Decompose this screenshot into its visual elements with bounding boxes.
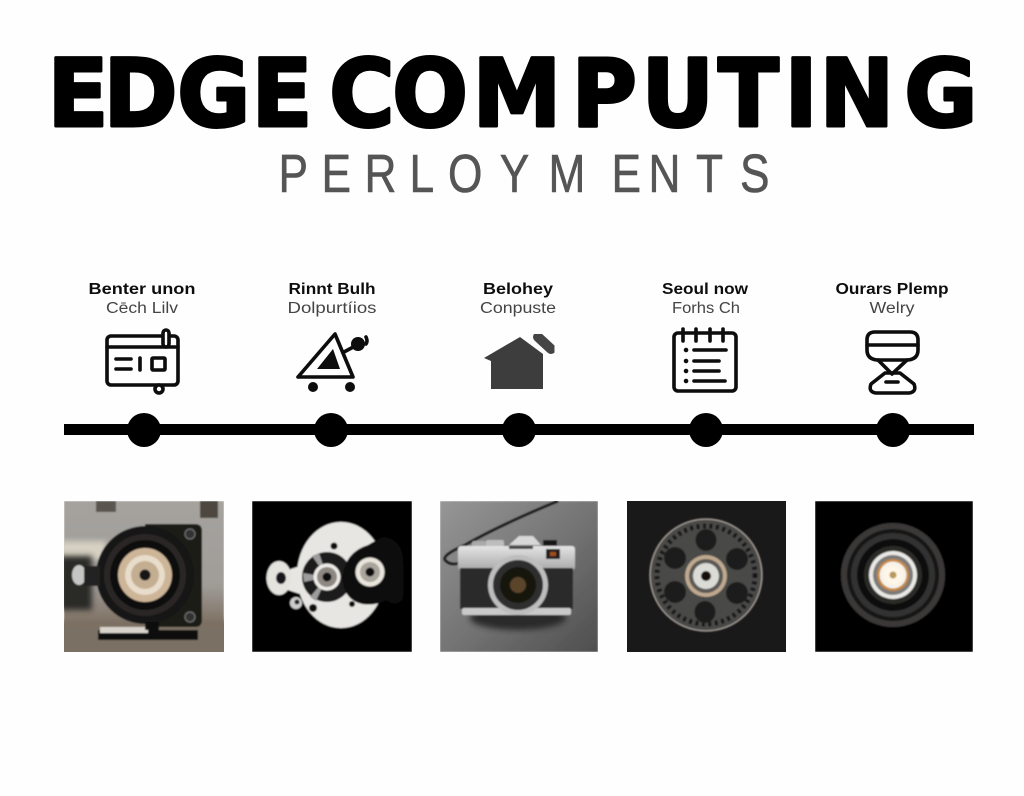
icon: control panel — [107, 330, 178, 393]
milestone 1 label: Benter unon — [88, 281, 196, 298]
icon: hourglass — [867, 332, 918, 393]
milestone 1 label: Cēch Lilv — [106, 300, 178, 317]
milestone 4 label: Forhs Ch — [672, 300, 740, 317]
milestone 1 label — [88, 281, 196, 317]
milestone 3 label: Belohey — [483, 281, 553, 298]
title: EDGE COMPUTING — [48, 39, 978, 148]
milestone 4 label — [662, 281, 749, 317]
timeline — [64, 413, 974, 447]
milestone 2 label: Rinnt Bulh — [288, 281, 376, 298]
milestone dots — [127, 413, 910, 447]
photo: vintage camera — [440, 501, 598, 652]
milestone 3 label: Conpuste — [480, 300, 556, 317]
milestone 5 label: Ourars Plemp — [836, 281, 948, 298]
milestone 5 label: Welry — [870, 300, 915, 317]
milestone 5 label — [836, 281, 948, 317]
photo: perforated wheel — [627, 501, 786, 652]
icon: notepad checklist — [674, 329, 736, 391]
photo: concentric lens — [815, 501, 973, 652]
photo: white plate assembly — [252, 501, 412, 652]
icon: house — [484, 337, 551, 389]
milestone 3 label — [480, 281, 556, 317]
photo: lens module — [64, 501, 224, 652]
milestone 2 label: Dolpurtíios — [288, 300, 377, 317]
subtitle: PERLOYMENTS — [278, 144, 770, 204]
milestone 4 label: Seoul now — [662, 281, 749, 298]
icon: triangle on wheels — [298, 334, 367, 392]
milestone 2 label — [288, 281, 377, 317]
